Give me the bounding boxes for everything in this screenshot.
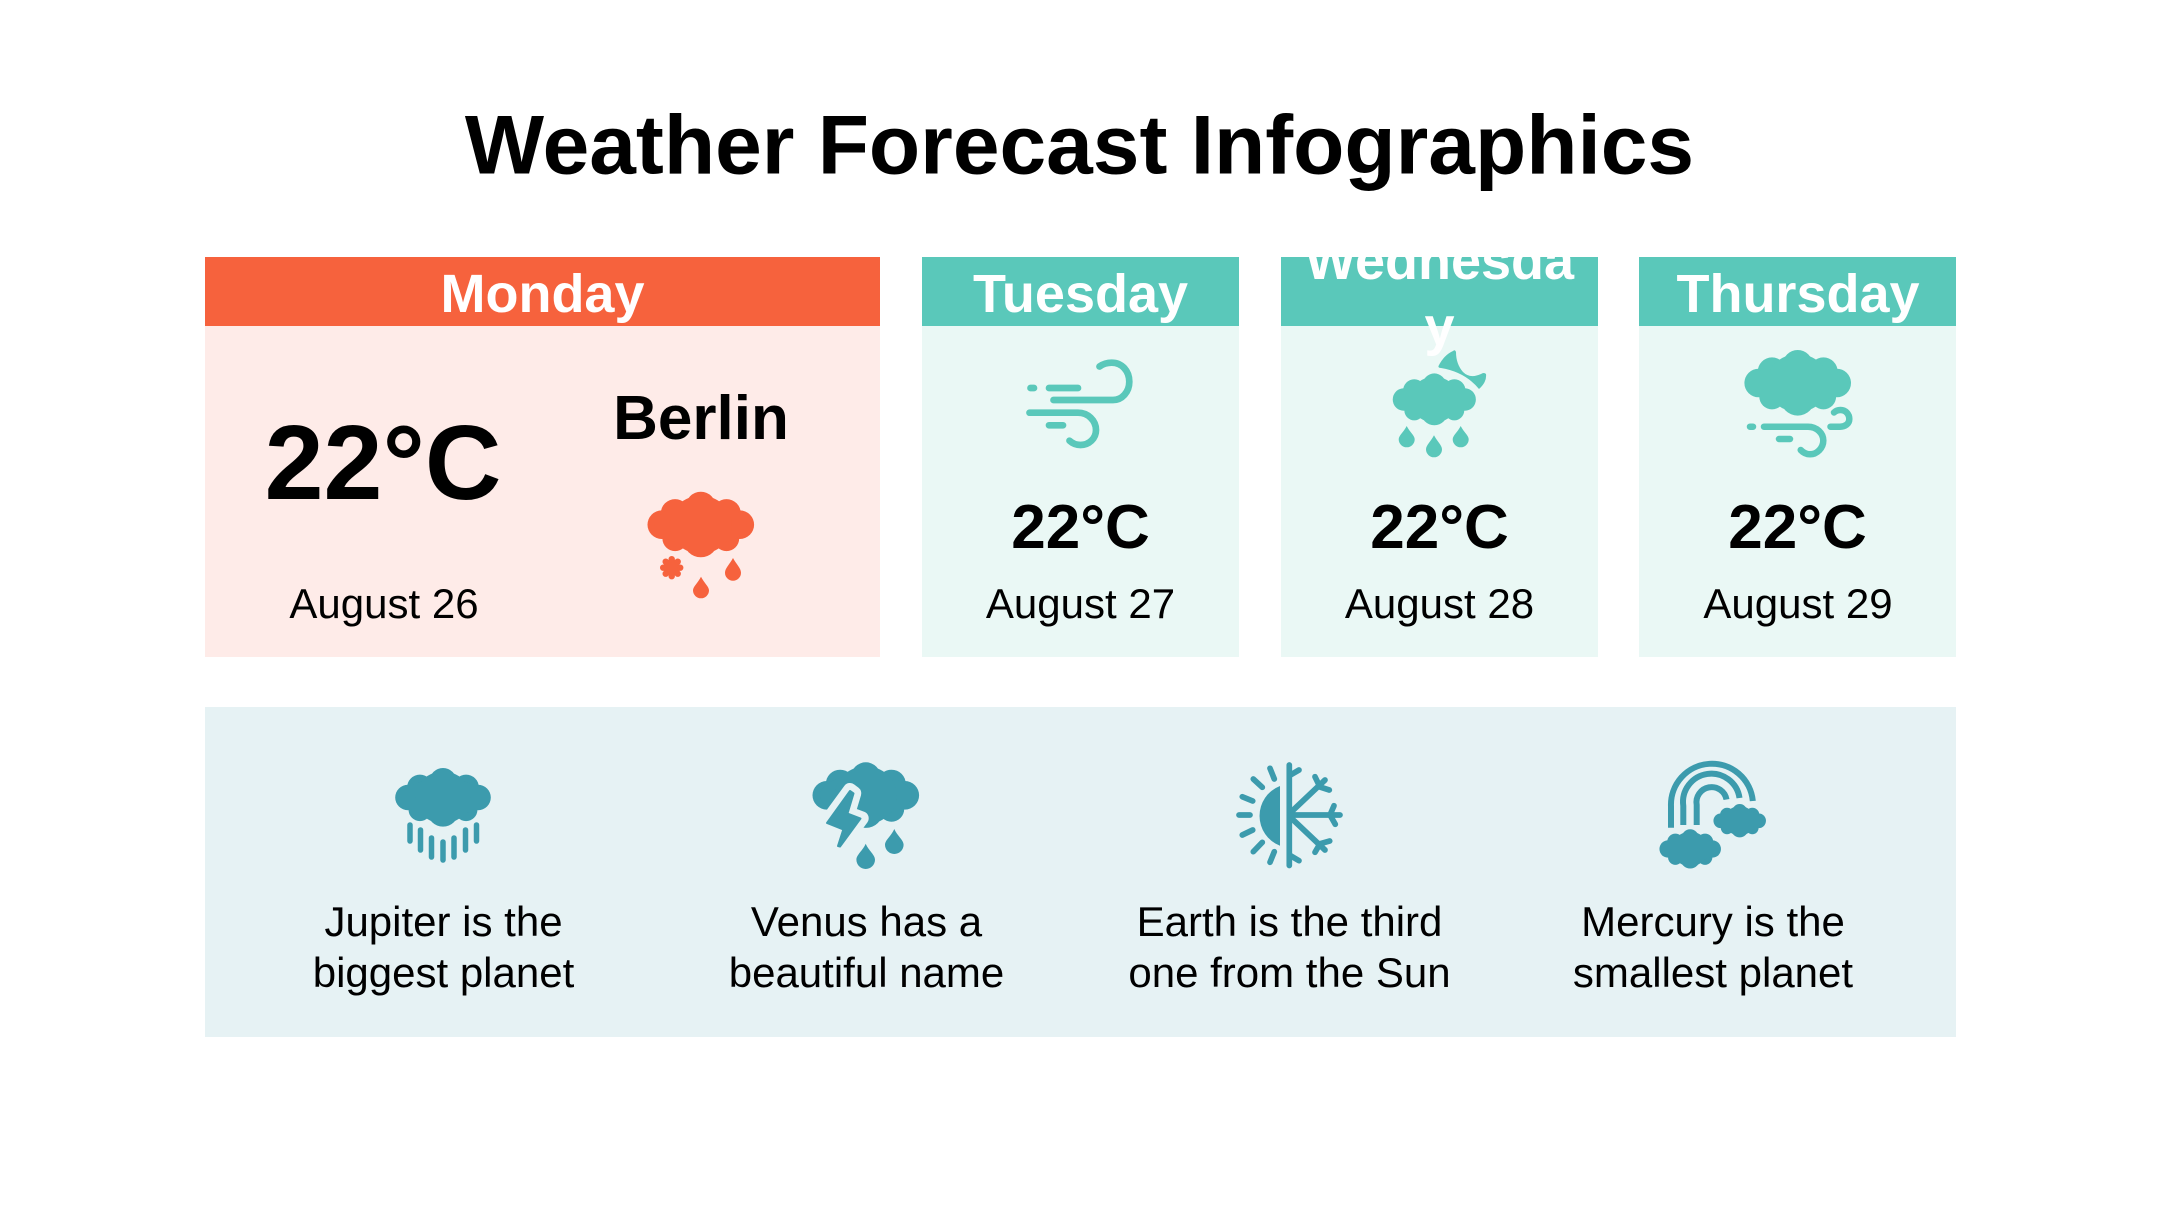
panel: Monday [205, 257, 880, 657]
Thursday header [1639, 257, 1956, 326]
city name: Berlin [613, 384, 789, 453]
panel: bottom facts [205, 707, 1956, 1037]
icon: cloud with snow and rain [648, 492, 754, 598]
text: Venus: Venus has a [751, 898, 983, 945]
Thursday date: August 29 [1703, 580, 1893, 627]
text: Mercury: smallest planet [1573, 949, 1853, 996]
Thursday header: Thursday [1676, 264, 1920, 324]
Monday date: August 26 [289, 580, 479, 627]
icon: heavy rain cloud [395, 768, 491, 860]
icon: wind [1030, 363, 1129, 445]
text: Venus: beautiful name [729, 949, 1004, 996]
Wednesday header: Wednesda [1305, 231, 1575, 291]
Monday temperature: 22°C [265, 404, 501, 522]
icon: rainbow with clouds [1659, 764, 1766, 869]
Wednesday date: August 28 [1345, 580, 1534, 627]
text: Mercury: Mercury is the [1581, 898, 1845, 945]
Tuesday temperature: 22°C [1011, 493, 1150, 562]
panel: Thursday [1639, 257, 1956, 657]
Wednesday temperature: 22°C [1370, 493, 1509, 562]
Tuesday date: August 27 [986, 580, 1175, 627]
icon: moon cloud with rain [1393, 350, 1486, 457]
icon: cloud with wind [1744, 350, 1851, 454]
Wednesday header [1281, 257, 1598, 356]
Wednesday header: y [1424, 297, 1455, 357]
text: Jupiter: Jupiter is the [324, 898, 563, 945]
text: Earth: one from the Sun [1128, 949, 1451, 996]
Tuesday header [922, 257, 1239, 326]
icon: storm cloud with rain [812, 762, 919, 869]
Monday header [205, 257, 880, 326]
Monday header: Monday [440, 264, 645, 324]
text: Jupiter: biggest planet [313, 949, 575, 996]
Tuesday header: Tuesday [973, 264, 1188, 324]
icon: half sun half snowflake [1239, 765, 1340, 866]
panel: Tuesday [922, 257, 1239, 657]
panel: Wednesday [1281, 231, 1598, 657]
title: Weather Forecast Infographics [465, 98, 1694, 192]
text: Earth: Earth is the third [1137, 898, 1442, 945]
Thursday temperature: 22°C [1728, 493, 1867, 562]
